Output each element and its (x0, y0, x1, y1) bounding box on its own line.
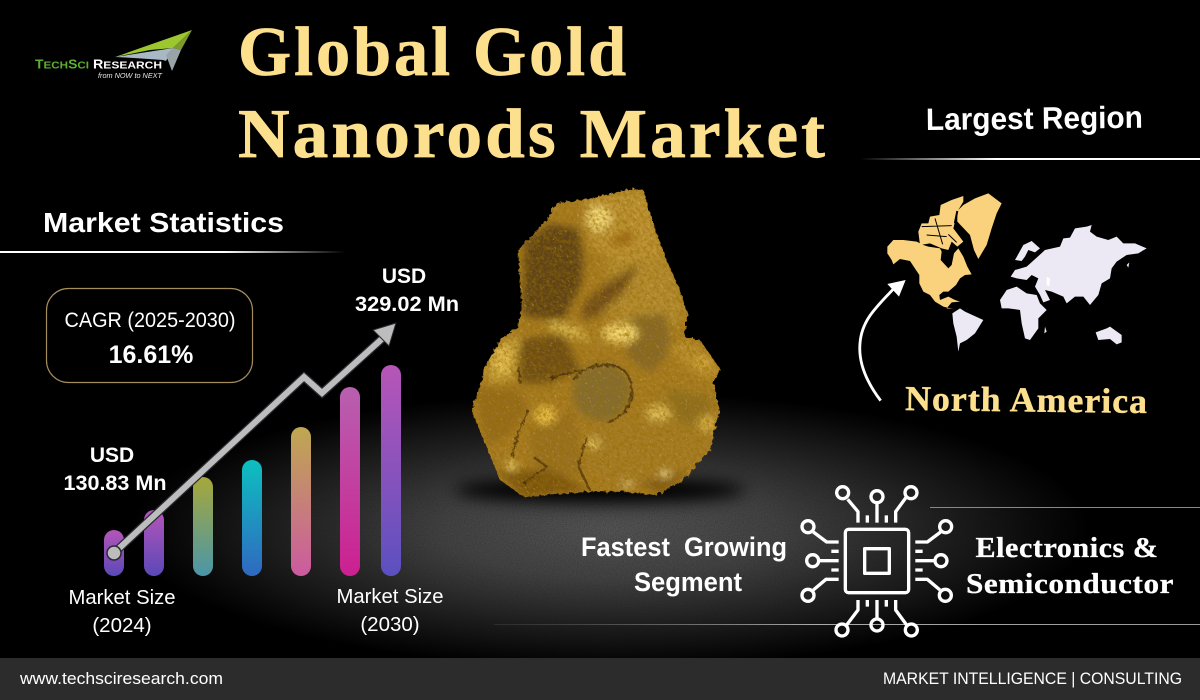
world map (887, 193, 1147, 352)
spotlight floor (168, 408, 1050, 656)
label: 2030 value: 329.02 Mn (355, 293, 459, 316)
other continents (1000, 225, 1147, 344)
logo: TECHSCI (35, 58, 89, 72)
footer (0, 658, 1200, 700)
trend arrow (107, 323, 396, 560)
title: Nanorods Market (238, 96, 828, 173)
CAGR callout: 16.61% (109, 341, 193, 369)
label: 2030 value: USD (382, 265, 426, 288)
label: fastest growing segment: Fastest Growing (581, 532, 787, 562)
south america (952, 308, 983, 352)
label: 2024 value: 130.83 Mn (64, 472, 166, 495)
label: fastest growing segment: Segment (634, 567, 742, 597)
label: market size 2024: (2024) (92, 614, 152, 637)
bar chart (104, 365, 401, 576)
CAGR callout (46, 288, 252, 382)
label: electronics and semiconductor (966, 533, 1174, 600)
CAGR callout: CAGR (2025-2030) (64, 309, 236, 332)
nugget shadow (455, 477, 745, 503)
label: market size 2024: Market Size (68, 586, 176, 609)
label: market size 2024 (68, 586, 176, 637)
logo (35, 30, 192, 80)
logo: RESEARCH (93, 58, 162, 72)
label: market size 2030 (336, 585, 444, 636)
region name: North America (905, 379, 1148, 421)
footer: www.techsciresearch.com (19, 669, 223, 688)
logo: from NOW to NEXT (98, 71, 163, 80)
label: electronics and semiconductor: Electronics & (976, 533, 1158, 564)
label: electronics and semiconductor: Semiconductor (966, 569, 1174, 600)
label: market size 2030: (2030) (360, 613, 420, 636)
segment frame lines (494, 507, 1200, 625)
title (238, 14, 828, 173)
label: 2024 value: USD (90, 444, 134, 467)
icon: microchip (802, 487, 952, 636)
gold nugget (463, 183, 730, 503)
curved arrow (860, 280, 906, 401)
heading: largest region: Largest Region (926, 100, 1143, 137)
footer: MARKET INTELLIGENCE | CONSULTING (883, 669, 1182, 688)
title: Global Gold (238, 14, 629, 91)
label: market size 2030: Market Size (336, 585, 444, 608)
label: 2030 value (355, 265, 459, 316)
heading: market statistics: Market Statistics (43, 207, 284, 238)
north america and greenland (887, 193, 1002, 309)
label: 2024 value (64, 444, 166, 495)
label: fastest growing segment (581, 532, 787, 597)
